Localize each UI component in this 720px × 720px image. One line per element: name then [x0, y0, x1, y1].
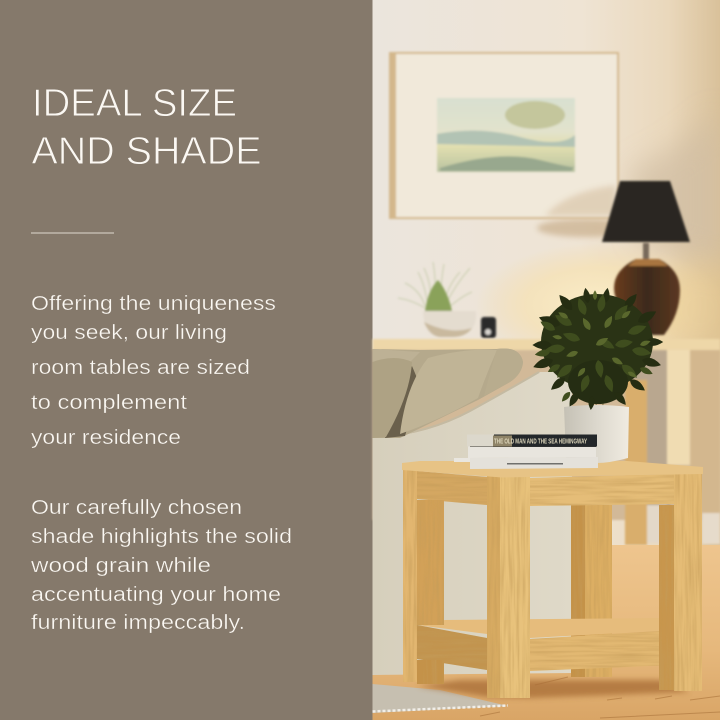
left text panel	[0, 0, 372, 720]
first paragraph: you seek, our living	[31, 321, 227, 344]
mat shadow	[545, 185, 616, 216]
wall shadow at right of picture	[630, 110, 720, 270]
first paragraph: room tables are sized	[31, 356, 250, 379]
books	[454, 434, 598, 469]
lamp base	[614, 259, 680, 335]
second paragraph: accentuating your home	[31, 583, 281, 606]
lamp shade	[602, 181, 690, 242]
picture cast shadow	[537, 219, 633, 237]
floor	[372, 545, 720, 720]
second paragraph: wood grain while	[30, 554, 211, 577]
first paragraph	[31, 292, 276, 449]
painting	[437, 98, 575, 172]
pot	[564, 405, 629, 463]
grass plant and bowl	[398, 262, 496, 338]
sofa	[372, 349, 572, 675]
table top	[402, 461, 703, 478]
lamp glow on wall	[475, 243, 720, 367]
heading: AND SHADE	[32, 130, 262, 173]
wall	[372, 0, 720, 545]
second paragraph: shade highlights the solid	[31, 525, 292, 548]
second paragraph	[30, 496, 292, 634]
glow at right of lamp	[650, 260, 720, 360]
floor planks	[480, 677, 720, 718]
potted plant	[532, 287, 663, 463]
second paragraph: Our carefully chosen	[31, 496, 242, 519]
second paragraph: furniture impeccably.	[31, 611, 245, 634]
rug	[372, 684, 508, 713]
lower shelf	[417, 618, 674, 671]
heading	[32, 82, 262, 173]
right front leg	[659, 474, 702, 691]
first paragraph: to complement	[31, 391, 187, 414]
center front leg	[487, 476, 530, 698]
stems	[588, 385, 606, 410]
foliage	[532, 287, 663, 410]
sofa cushions	[372, 349, 523, 438]
books: THE OLD MAN AND THE SEA HEMINGWAY	[494, 436, 587, 446]
framed picture	[389, 52, 619, 219]
table shadow	[417, 680, 690, 698]
first paragraph: Offering the uniqueness	[31, 292, 276, 315]
console table behind sofa	[372, 339, 720, 545]
room photo	[372, 0, 720, 720]
table lamp	[602, 181, 690, 335]
heading divider	[31, 232, 114, 234]
heading: IDEAL SIZE	[32, 82, 237, 125]
end table	[402, 461, 703, 698]
rear leg	[571, 505, 612, 677]
left front leg	[403, 470, 444, 684]
right apron	[530, 474, 674, 506]
left apron	[417, 471, 487, 505]
first paragraph: your residence	[31, 426, 181, 449]
